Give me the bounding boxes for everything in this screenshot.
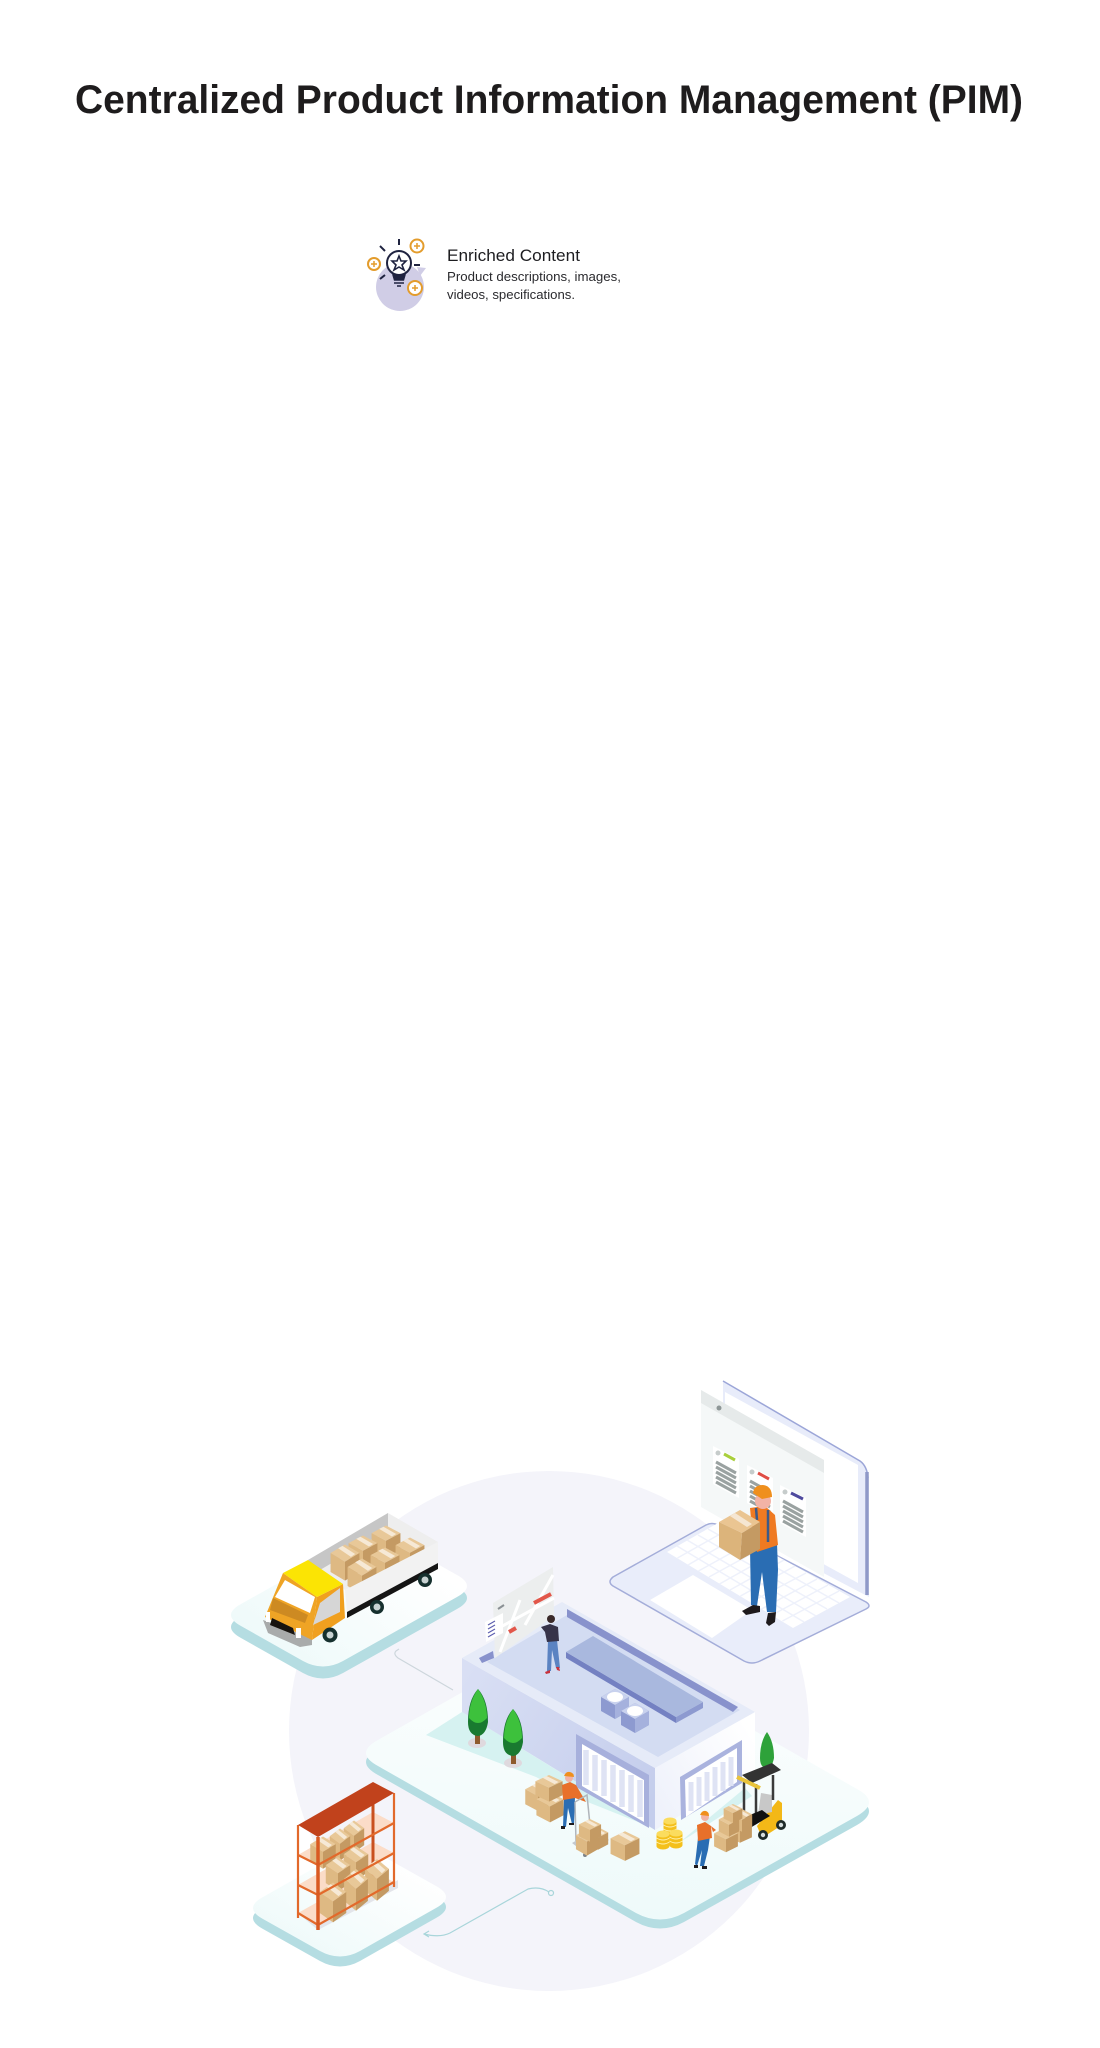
product card: purple [780,1485,806,1537]
feature heading: Enriched Content [447,246,580,265]
product card: green [713,1446,739,1498]
arrow: warehouse to shelf connector [424,1888,554,1937]
background circle [289,1471,809,1991]
tree [468,1689,488,1748]
storage shelf with boxes [298,1782,398,1930]
cart with boxes [572,1795,609,1857]
tree [503,1709,523,1768]
panel: warehouse platform [366,1636,869,1928]
icon: lightbulb with star [368,239,426,311]
worker standing [694,1811,716,1869]
laptop screen [723,1381,869,1597]
right dock door [680,1740,742,1820]
list card [485,1613,503,1642]
roof [462,1602,755,1768]
warehouse building [426,1602,774,1842]
shelf frame [298,1793,394,1930]
worker legs [750,1543,778,1612]
panel: truck platform [231,1534,467,1678]
worker head [755,1493,771,1509]
illustration: warehouse logistics scene [231,1381,869,1991]
truck bed [308,1513,438,1590]
shelf boxes [310,1820,389,1922]
trackpad [650,1575,752,1638]
truck cargo boxes [331,1526,424,1595]
worker shoes [742,1605,776,1626]
feature description: Product descriptions, images, [447,269,621,284]
skylight [566,1636,703,1723]
truck wheels [370,1573,432,1614]
laptop base [610,1524,869,1663]
arrow: truck to warehouse connector [395,1649,453,1690]
rooftop units [601,1689,649,1733]
ground shadow [426,1712,648,1826]
person on roof [541,1615,560,1674]
stacked boxes [525,1775,564,1822]
title: Centralized Product Information Management (PIM) [75,78,1023,122]
tree [760,1732,774,1768]
product card: red [747,1465,773,1517]
left dock door [576,1734,649,1828]
feature description [447,269,621,302]
keyboard [667,1523,850,1628]
yellow barrels [656,1818,682,1850]
forklift with boxes [714,1763,786,1852]
feature description: videos, specifications. [447,287,575,302]
cardboard box [611,1831,639,1861]
shelf boards [298,1812,394,1925]
walls [462,1658,655,1830]
panel: shelf platform [253,1848,446,1966]
panel: laptop [610,1381,869,1663]
route map panel [485,1567,554,1658]
worker carrying box [719,1485,778,1626]
worker torso [750,1506,778,1552]
worker with cart [561,1772,586,1829]
app window on screen [701,1390,824,1577]
carried box [719,1510,760,1560]
feature: enriched content [368,239,621,311]
truck cab [263,1560,345,1647]
delivery truck [263,1513,438,1647]
truck side panel [345,1542,438,1612]
